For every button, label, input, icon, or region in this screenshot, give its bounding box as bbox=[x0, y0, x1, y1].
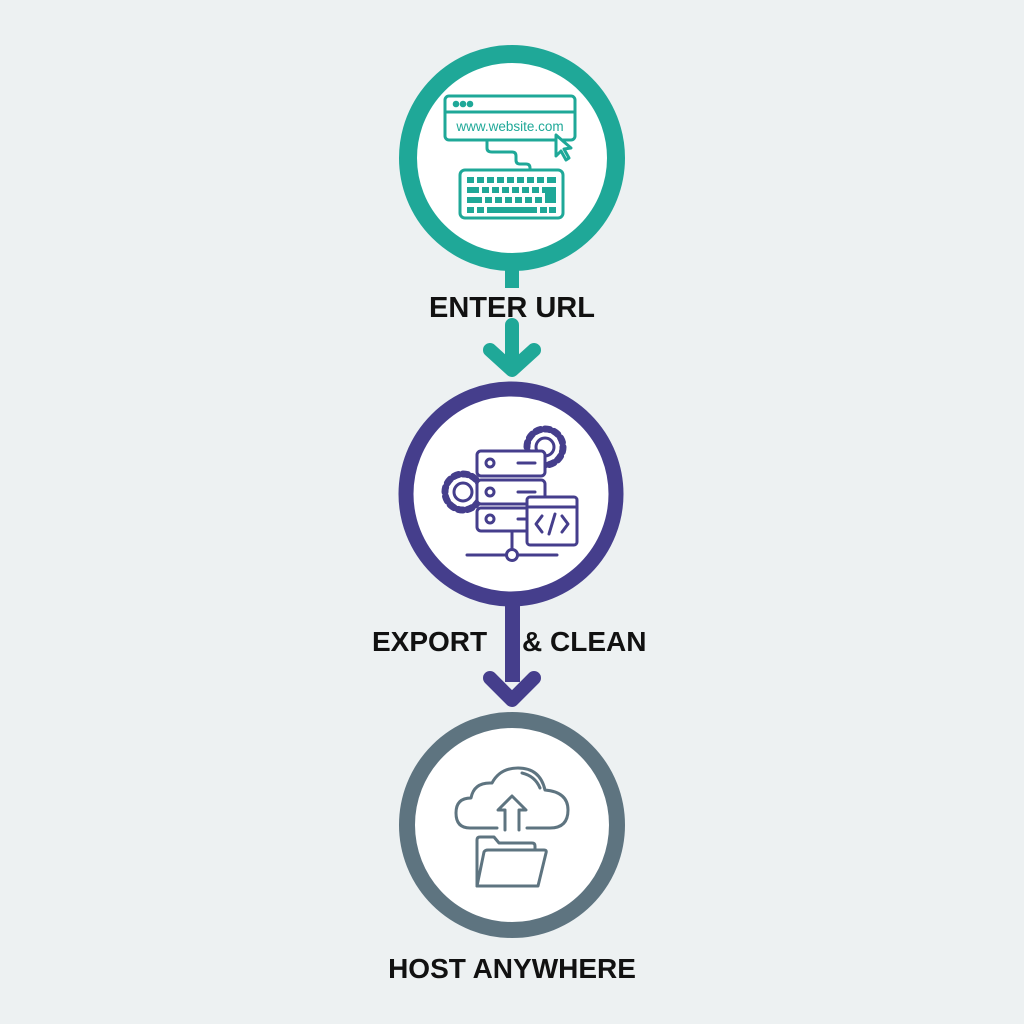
label: export & clean: & CLEAN bbox=[522, 626, 646, 657]
step 1: enter url bbox=[408, 54, 616, 370]
circle 2 bbox=[406, 389, 616, 599]
circle 3 bbox=[407, 720, 617, 930]
arrow 2 head bbox=[490, 678, 534, 700]
step 2: export & clean bbox=[372, 389, 646, 700]
circle 1 bbox=[408, 54, 616, 262]
label: enter url: ENTER URL bbox=[429, 292, 595, 324]
icon: cloud upload folder bbox=[456, 768, 568, 886]
label: export & clean: EXPORT bbox=[372, 626, 487, 657]
arrow 1 bbox=[490, 325, 534, 370]
icon: browser and keyboard: www.website.com bbox=[455, 119, 564, 134]
step 3: host anywhere bbox=[388, 720, 636, 984]
icon: browser and keyboard bbox=[445, 96, 575, 218]
icon: servers gears code bbox=[445, 429, 577, 560]
connector 1 top bbox=[505, 262, 519, 288]
label: host anywhere: HOST ANYWHERE bbox=[388, 953, 636, 984]
label: export & clean bbox=[372, 626, 646, 657]
connector 2 bbox=[505, 597, 520, 682]
